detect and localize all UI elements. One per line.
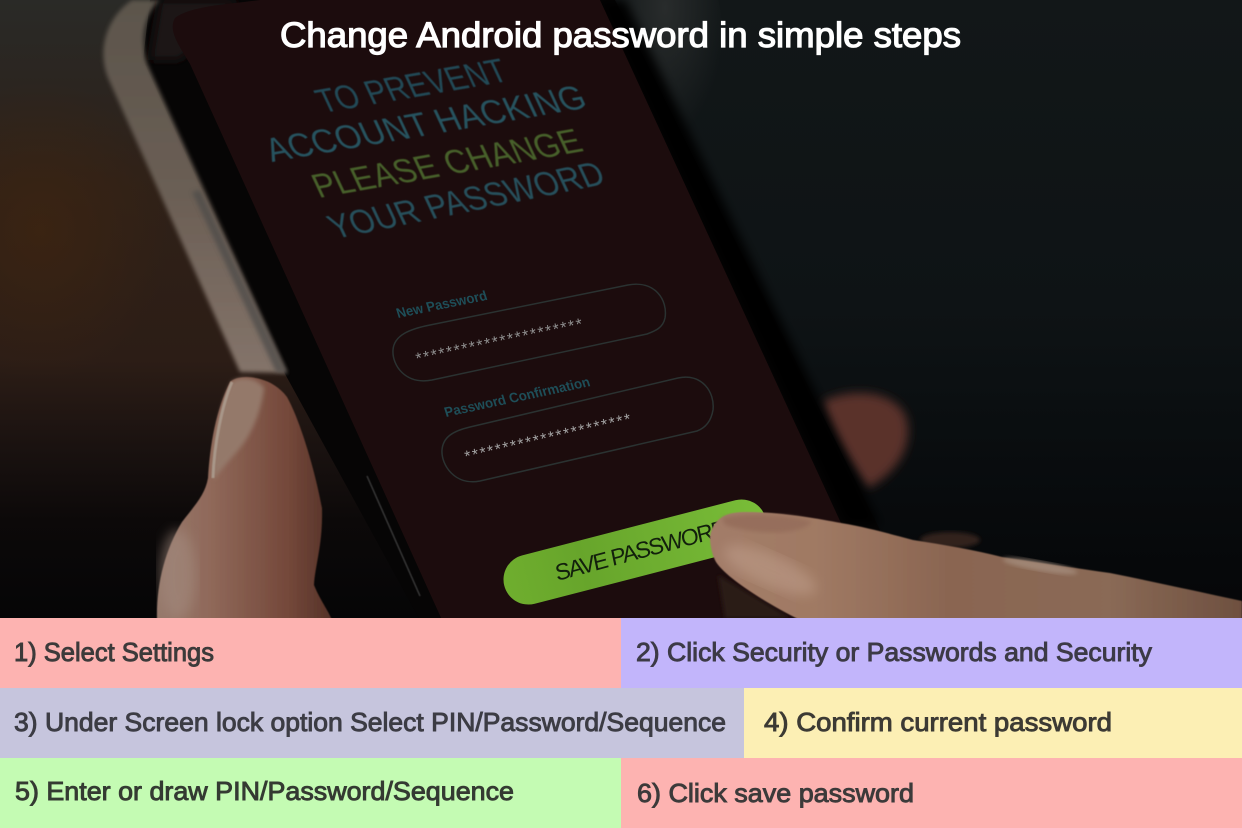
- step 2: [621, 618, 1242, 688]
- field labels and masked values: New Password: [394, 287, 489, 321]
- index finger: [710, 512, 1242, 620]
- step 1: 1) Select Settings: [14, 637, 214, 667]
- fingertip highlight: [718, 535, 822, 605]
- phone edge highlight: [367, 476, 420, 596]
- step 4: [744, 688, 1242, 758]
- step 3: [0, 688, 744, 758]
- phone body: [103, 0, 880, 620]
- heading on phone: PLEASE CHANGE: [306, 122, 588, 205]
- fingernail: [722, 515, 812, 533]
- save password button: SAVE PASSWORD: [553, 514, 730, 586]
- save password button: [498, 494, 772, 610]
- step 4: 4) Confirm current password: [764, 707, 1112, 737]
- password fields: [393, 284, 713, 482]
- title: Change Android password in simple steps: [280, 16, 961, 55]
- thumb base highlight: [160, 530, 196, 620]
- step 3: 3) Under Screen lock option Select PIN/Password/Sequence: [14, 707, 726, 737]
- screen: [173, 0, 868, 620]
- step 5: [0, 758, 621, 828]
- thumbnail: [214, 378, 264, 480]
- field labels and masked values: Password Confirmation: [442, 374, 592, 420]
- field labels and masked values: [394, 287, 633, 466]
- heading on phone: TO PREVENT: [310, 52, 514, 120]
- field labels and masked values: **********************: [414, 316, 584, 368]
- finger reflection on screen: [718, 575, 790, 618]
- background: [0, 0, 1242, 620]
- blurred finger behind index finger: [920, 532, 980, 548]
- step 6: 6) Click save password: [637, 778, 914, 808]
- step 1: [0, 618, 621, 688]
- blurred finger behind phone: [822, 393, 908, 488]
- heading on phone: ACCOUNT HACKING: [259, 78, 593, 169]
- field labels and masked values: **********************: [463, 411, 633, 466]
- left thumb: [157, 377, 332, 620]
- step 6: [621, 758, 1242, 828]
- heading on phone: YOUR PASSWORD: [322, 155, 611, 246]
- step 2: 2) Click Security or Passwords and Security: [636, 637, 1152, 667]
- knuckle crease highlight: [1002, 554, 1078, 578]
- step 5: 5) Enter or draw PIN/Password/Sequence: [15, 776, 514, 806]
- heading on phone: [259, 52, 611, 246]
- phone rim: [103, 0, 287, 373]
